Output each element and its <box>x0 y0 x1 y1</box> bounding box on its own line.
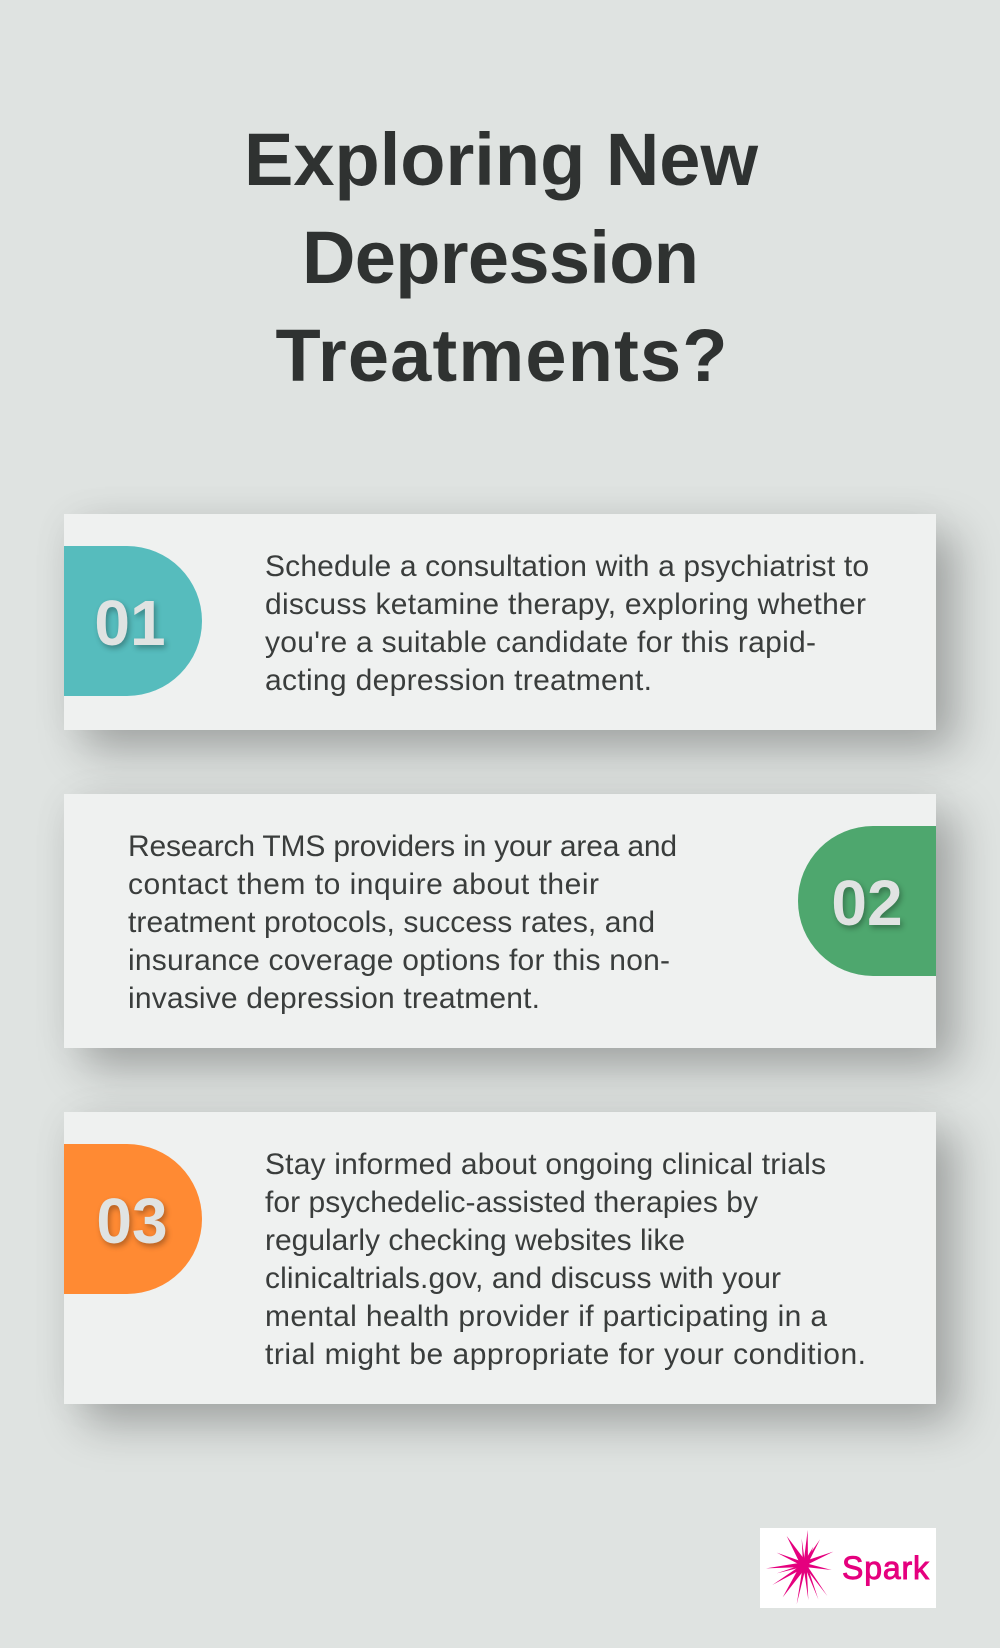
badge: 02: 02 <box>831 867 903 939</box>
text: step 03 description: Stay informed about ongoing clinical trials <box>265 1148 826 1181</box>
text: step 01 description: you're a suitable candidate for this rapid- <box>265 626 816 659</box>
text: Spark wordmark: Spark <box>842 1550 930 1586</box>
text: step 01 description: acting depression treatment. <box>265 664 652 697</box>
text: step 03 description: for psychedelic-assisted therapies by <box>265 1186 758 1219</box>
logo: Spark <box>760 1528 936 1608</box>
text: step 01 description: Schedule a consultation with a psychiatrist to <box>265 550 869 583</box>
panel: step 03 <box>64 1112 936 1404</box>
text: step 03 description: regularly checking websites like <box>265 1224 685 1257</box>
text: step 02 description: treatment protocols, success rates, and <box>128 906 655 939</box>
text: step 03 description: clinicaltrials.gov, and discuss with your <box>265 1262 781 1295</box>
title: Exploring New <box>244 118 758 201</box>
badge: 03: 03 <box>96 1185 168 1257</box>
text: step 02 description: invasive depression treatment. <box>128 982 540 1015</box>
panel: step 02 <box>64 794 936 1048</box>
icon: spark star <box>766 1530 834 1604</box>
text: step 01 description: discuss ketamine therapy, exploring whether <box>265 588 866 621</box>
text: step 02 description <box>128 830 677 1015</box>
title: Depression <box>302 216 699 299</box>
text: step 01 description <box>265 550 869 697</box>
badge: 01: 01 <box>94 587 166 659</box>
panel: step 01 <box>64 514 936 730</box>
text: step 03 description <box>265 1148 866 1371</box>
title: Treatments? <box>276 314 728 397</box>
text: step 03 description: trial might be appropriate for your condition. <box>265 1338 866 1371</box>
badge: 03 <box>64 1144 202 1294</box>
text: step 02 description: insurance coverage options for this non- <box>128 944 670 977</box>
text: step 02 description: Research TMS providers in your area and <box>128 830 677 863</box>
badge: 01 <box>64 546 202 696</box>
text: step 02 description: contact them to inquire about their <box>128 868 599 901</box>
text: step 03 description: mental health provider if participating in a <box>265 1300 827 1333</box>
title <box>244 118 758 397</box>
badge: 02 <box>798 826 936 976</box>
